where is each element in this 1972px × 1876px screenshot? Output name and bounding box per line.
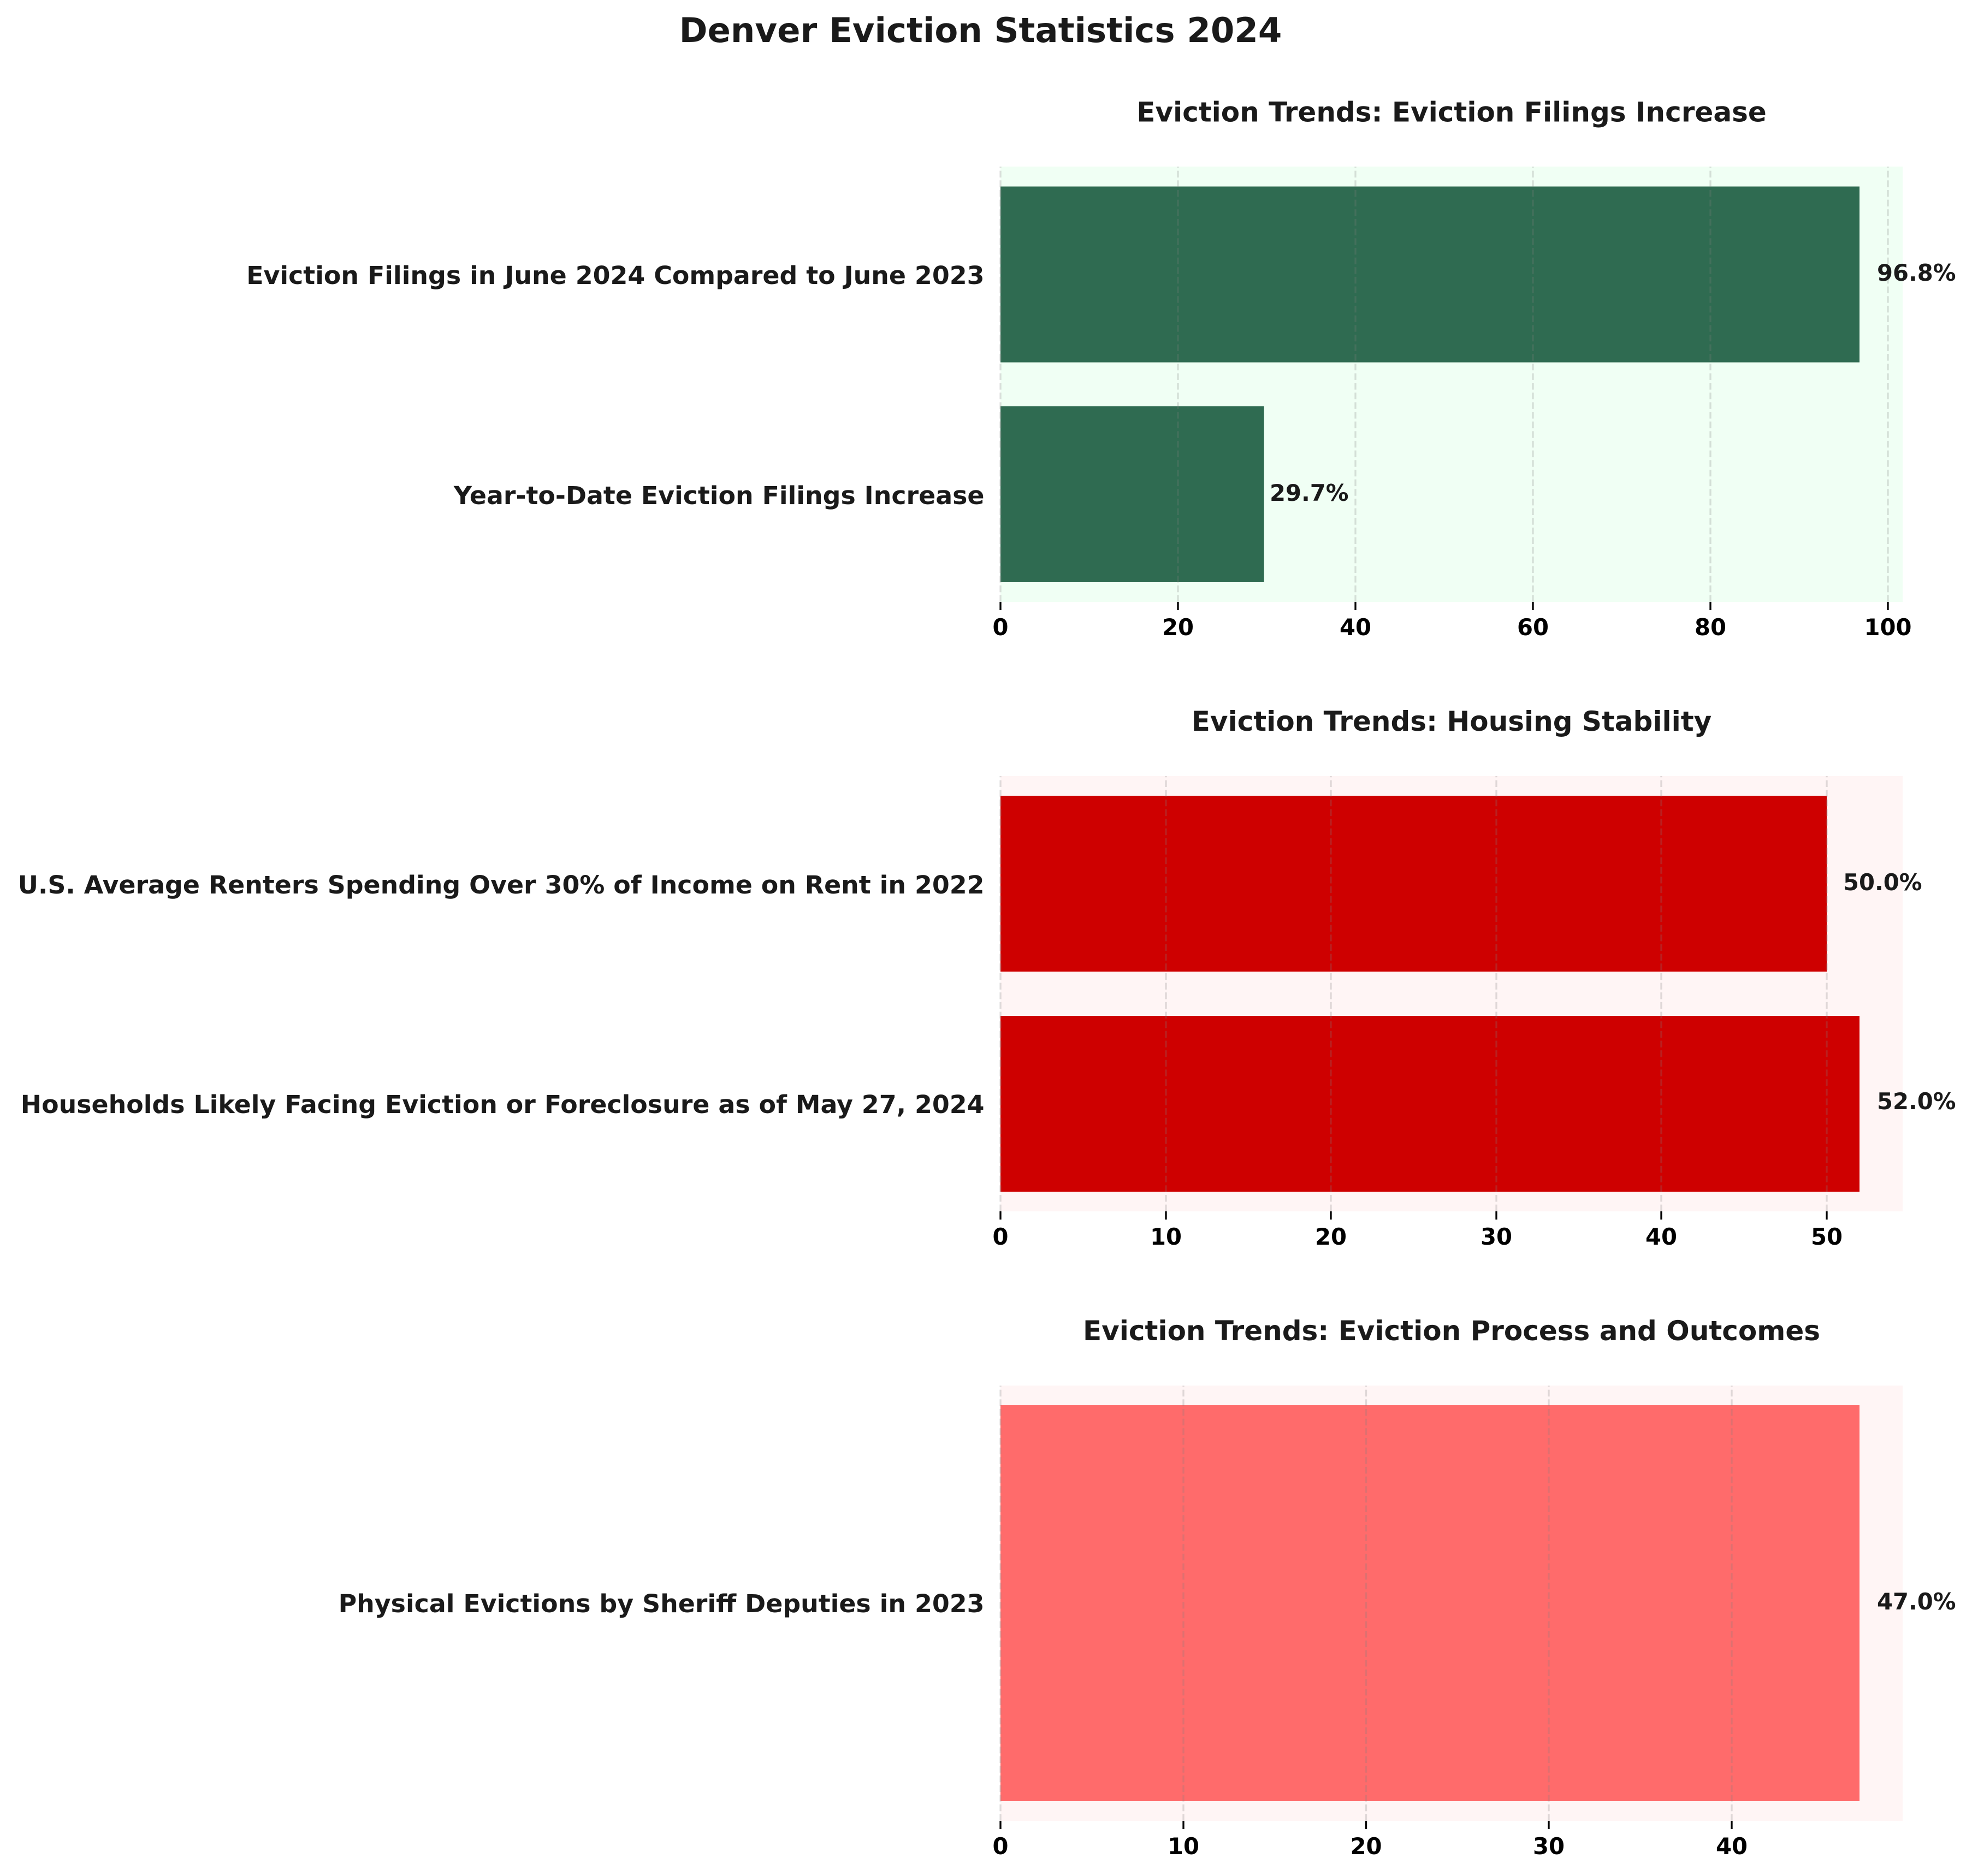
x axis tick labels: 0 (993, 1833, 1008, 1860)
x axis tick labels: 10 (1168, 1833, 1199, 1860)
vertical grid lines (1000, 167, 1888, 602)
plot background (1000, 1386, 1903, 1821)
main title: Denver Eviction Statistics 2024 (679, 10, 1282, 50)
label: households facing eviction: Households Likely Facing Eviction or Foreclosure as of May 27, 2024 (21, 1090, 984, 1119)
vertical grid lines (1000, 776, 1827, 1211)
x axis tick labels: 20 (1351, 1833, 1382, 1860)
value: 29.7%: 29.7% (1270, 480, 1349, 506)
x axis tick labels: 80 (1695, 614, 1726, 641)
bar: June 2024 compared to June 2023 (1000, 187, 1860, 363)
x axis tick labels: 0 (993, 1223, 1008, 1250)
bar: year-to-date increase (1000, 406, 1264, 582)
x axis tick labels (993, 614, 1911, 641)
x axis ticks (1000, 1821, 1732, 1829)
x axis tick labels: 40 (1645, 1223, 1677, 1250)
bar: households facing eviction (1000, 1016, 1860, 1192)
x axis tick labels: 30 (1481, 1223, 1512, 1250)
x axis tick labels (993, 1833, 1748, 1860)
bar: physical evictions (1000, 1405, 1860, 1801)
x axis tick labels: 10 (1150, 1223, 1182, 1250)
x axis ticks (1000, 602, 1888, 610)
panel: eviction process and outcomes (339, 1315, 1956, 1860)
panel: housing stability (18, 706, 1956, 1250)
value: 47.0%: 47.0% (1877, 1588, 1956, 1615)
x axis tick labels: 20 (1162, 614, 1194, 641)
label: U.S. average renters: U.S. Average Renters Spending Over 30% of Income on Rent in 2022 (18, 870, 984, 899)
label: physical evictions: Physical Evictions by Sheriff Deputies in 2023 (339, 1589, 984, 1618)
panel: eviction filings increase (246, 96, 1956, 641)
label: June filings: Eviction Filings in June 2024 Compared to June 2023 (246, 261, 984, 290)
x axis tick labels: 0 (993, 614, 1008, 641)
x axis tick labels: 40 (1716, 1833, 1748, 1860)
x axis tick labels (993, 1223, 1843, 1250)
x axis tick labels: 60 (1517, 614, 1549, 641)
x axis tick labels: 50 (1811, 1223, 1843, 1250)
plot background (1000, 167, 1903, 602)
x axis tick labels: 20 (1315, 1223, 1347, 1250)
value: 52.0%: 52.0% (1877, 1088, 1956, 1115)
plot background (1000, 776, 1903, 1211)
x axis tick labels: 100 (1864, 614, 1911, 641)
x axis ticks (1000, 1211, 1827, 1220)
vertical grid lines (1000, 1386, 1732, 1821)
x axis tick labels: 30 (1533, 1833, 1565, 1860)
bar: U.S. average renters (1000, 796, 1827, 972)
value: 96.8%: 96.8% (1877, 259, 1956, 286)
label: year-to-date filings: Year-to-Date Eviction Filings Increase (453, 481, 984, 510)
panel heading: Eviction Trends: Eviction Filings Increase (1136, 96, 1767, 128)
panel heading: Eviction Trends: Housing Stability (1192, 706, 1712, 737)
value: 50.0%: 50.0% (1843, 869, 1922, 896)
panel heading: Eviction Trends: Eviction Process and Outcomes (1083, 1315, 1820, 1347)
x axis tick labels: 40 (1340, 614, 1371, 641)
